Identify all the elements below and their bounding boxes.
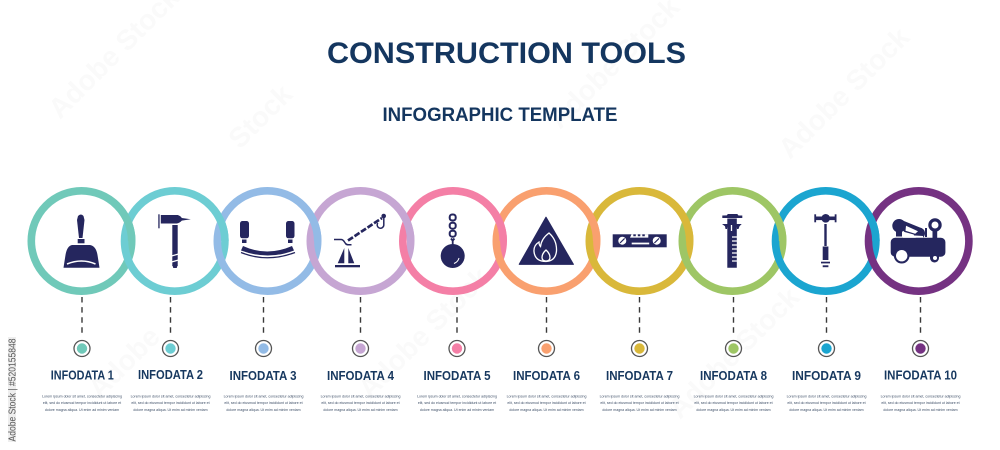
icon: crane bbox=[334, 214, 386, 267]
interlocking rings bbox=[31, 191, 969, 291]
item 7 bbox=[600, 297, 679, 412]
item 1: elit, sed do eiusmod tempor incididunt ut labore et bbox=[43, 401, 121, 405]
item 4: dolore magna aliqua. Ut enim ad minim veniam bbox=[323, 408, 398, 412]
item 6: elit, sed do eiusmod tempor incididunt ut labore et bbox=[507, 401, 586, 405]
item 7: INFODATA 7 bbox=[606, 369, 673, 383]
icon: air compressor bbox=[891, 218, 945, 264]
item 1: dolore magna aliqua. Ut enim ad minim veniam bbox=[45, 408, 119, 412]
item 5: INFODATA 5 bbox=[424, 369, 491, 383]
item 7: dolore magna aliqua. Ut enim ad minim veniam bbox=[602, 408, 677, 412]
item 9: dolore magna aliqua. Ut enim ad minim veniam bbox=[789, 408, 864, 412]
item 9: Lorem ipsum dolor sit amet, consectetur adipiscing bbox=[787, 394, 866, 398]
item 4: INFODATA 4 bbox=[327, 369, 394, 383]
item 3 bbox=[224, 297, 303, 412]
item 10 bbox=[881, 297, 960, 412]
item 8: elit, sed do eiusmod tempor incididunt ut labore et bbox=[694, 401, 773, 405]
title: CONSTRUCTION TOOLS bbox=[327, 37, 686, 70]
item 2: dolore magna aliqua. Ut enim ad minim veniam bbox=[133, 408, 208, 412]
item 10: Lorem ipsum dolor sit amet, consectetur adipiscing bbox=[881, 394, 960, 398]
icon: spirit level bbox=[613, 234, 667, 247]
item 4: Lorem ipsum dolor sit amet, consectetur adipiscing bbox=[321, 394, 400, 398]
item 8 bbox=[694, 297, 773, 412]
icon: hammer bbox=[158, 214, 191, 268]
item 1 bbox=[42, 297, 122, 412]
icon: caliper bbox=[722, 214, 742, 268]
item 3: INFODATA 3 bbox=[230, 369, 297, 383]
item 7: elit, sed do eiusmod tempor incididunt ut labore et bbox=[600, 401, 679, 405]
item 8: Lorem ipsum dolor sit amet, consectetur adipiscing bbox=[694, 394, 773, 398]
icon: wrecking ball bbox=[441, 214, 465, 268]
icon: fire hazard triangle bbox=[519, 217, 573, 264]
item 8: INFODATA 8 bbox=[700, 369, 767, 383]
item 2: INFODATA 2 bbox=[138, 368, 203, 382]
text: Adobe bbox=[82, 321, 166, 404]
item 5: Lorem ipsum dolor sit amet, consectetur adipiscing bbox=[417, 394, 497, 398]
item 9: INFODATA 9 bbox=[792, 369, 861, 383]
text: Adobe Stock bbox=[662, 281, 806, 424]
item 10: INFODATA 10 bbox=[884, 368, 957, 382]
item 6: dolore magna aliqua. Ut enim ad minim veniam bbox=[509, 408, 584, 412]
item 4 bbox=[321, 297, 400, 412]
item 5: elit, sed do eiusmod tempor incididunt ut labore et bbox=[418, 401, 496, 405]
item 9: elit, sed do eiusmod tempor incididunt ut labore et bbox=[787, 401, 866, 405]
stock id side label: Adobe Stock | #520155848 bbox=[8, 338, 18, 442]
item 6 bbox=[507, 297, 586, 412]
item 3: elit, sed do eiusmod tempor incididunt ut labore et bbox=[224, 401, 303, 405]
item 5: dolore magna aliqua. Ut enim ad minim veniam bbox=[420, 408, 494, 412]
item 2: elit, sed do eiusmod tempor incididunt ut labore et bbox=[131, 401, 210, 405]
item 7: Lorem ipsum dolor sit amet, consectetur adipiscing bbox=[600, 394, 679, 398]
item 6: INFODATA 6 bbox=[513, 369, 580, 383]
item 10: elit, sed do eiusmod tempor incididunt ut labore et bbox=[881, 401, 960, 405]
text: Adobe Stock bbox=[772, 21, 916, 164]
item 8: dolore magna aliqua. Ut enim ad minim veniam bbox=[696, 408, 771, 412]
text: Adobe Stock bbox=[352, 261, 496, 404]
icon: ball-peen hammer bbox=[814, 214, 836, 267]
item 2: Lorem ipsum dolor sit amet, consectetur adipiscing bbox=[131, 394, 210, 398]
item 1: Lorem ipsum dolor sit amet, consectetur adipiscing bbox=[42, 394, 122, 398]
icon: dustpan bbox=[64, 214, 100, 268]
item 2 bbox=[131, 297, 210, 412]
item 6: Lorem ipsum dolor sit amet, consectetur adipiscing bbox=[507, 394, 586, 398]
item 3: Lorem ipsum dolor sit amet, consectetur adipiscing bbox=[224, 394, 303, 398]
item 1: INFODATA 1 bbox=[51, 368, 114, 382]
subtitle: INFOGRAPHIC TEMPLATE bbox=[382, 104, 618, 126]
item 3: dolore magna aliqua. Ut enim ad minim veniam bbox=[226, 408, 301, 412]
item 5 bbox=[417, 297, 497, 412]
item 10: dolore magna aliqua. Ut enim ad minim veniam bbox=[883, 408, 958, 412]
item 9 bbox=[787, 297, 866, 412]
icon: two-handled saw bbox=[240, 221, 295, 258]
item 4: elit, sed do eiusmod tempor incididunt ut labore et bbox=[321, 401, 400, 405]
text: Stock bbox=[222, 78, 298, 154]
